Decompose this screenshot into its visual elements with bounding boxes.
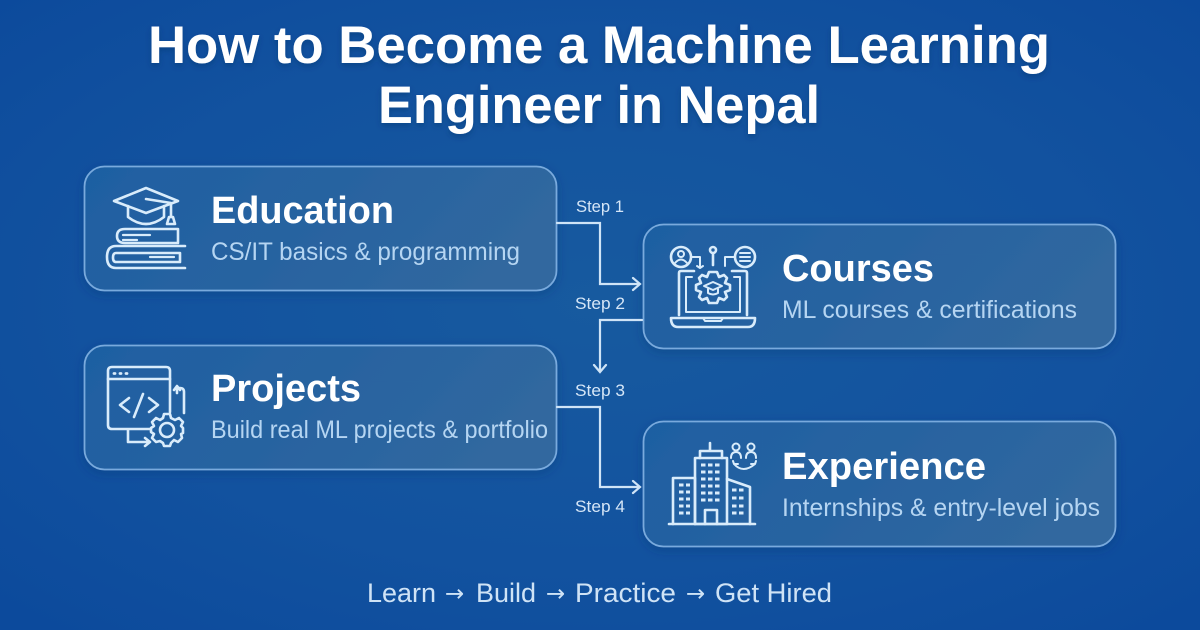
- label: Step 2: Step 2: [575, 294, 625, 313]
- footer tagline: →: [546, 581, 565, 607]
- footer tagline: →: [445, 581, 464, 607]
- heading: Courses: Courses: [782, 248, 934, 290]
- heading: Education: Education: [211, 190, 394, 232]
- footer tagline: →: [686, 581, 705, 607]
- footer tagline: Build: [476, 578, 536, 608]
- panel: Courses: [644, 224, 1116, 348]
- label: Step 1: Step 1: [576, 197, 624, 216]
- icon: office buildings with people: [669, 443, 756, 524]
- heading: Projects: Projects: [211, 368, 361, 410]
- text: Projects description: Build real ML projects & portfolio: [211, 416, 548, 444]
- text: Experience description: Internships & entry-level jobs: [782, 494, 1100, 522]
- label: Step 3: Step 3: [575, 381, 625, 400]
- label: Step 4: Step 4: [575, 497, 625, 516]
- footer tagline: Get Hired: [715, 578, 832, 608]
- heading: Experience: Experience: [782, 446, 986, 488]
- text: Courses description: ML courses & certifications: [782, 296, 1077, 324]
- icon: graduation cap on books: [107, 188, 185, 268]
- title: [148, 16, 1050, 135]
- text: Education description: CS/IT basics & programming: [211, 238, 520, 266]
- footer tagline: Practice: [575, 578, 676, 608]
- icon: laptop with gear: [671, 247, 755, 327]
- arrow: Projects to Experience: [557, 407, 640, 493]
- title: Engineer in Nepal: [378, 76, 820, 135]
- title: How to Become a Machine Learning: [148, 16, 1050, 75]
- panel: Experience: [644, 422, 1116, 546]
- panel: Education: [84, 166, 556, 290]
- footer tagline: Learn: [367, 578, 436, 608]
- arrow: Education to Courses: [557, 223, 640, 290]
- arrow: Courses to Projects: [594, 320, 642, 372]
- panel: Projects: [84, 346, 556, 470]
- icon: code window with gear: [108, 367, 184, 446]
